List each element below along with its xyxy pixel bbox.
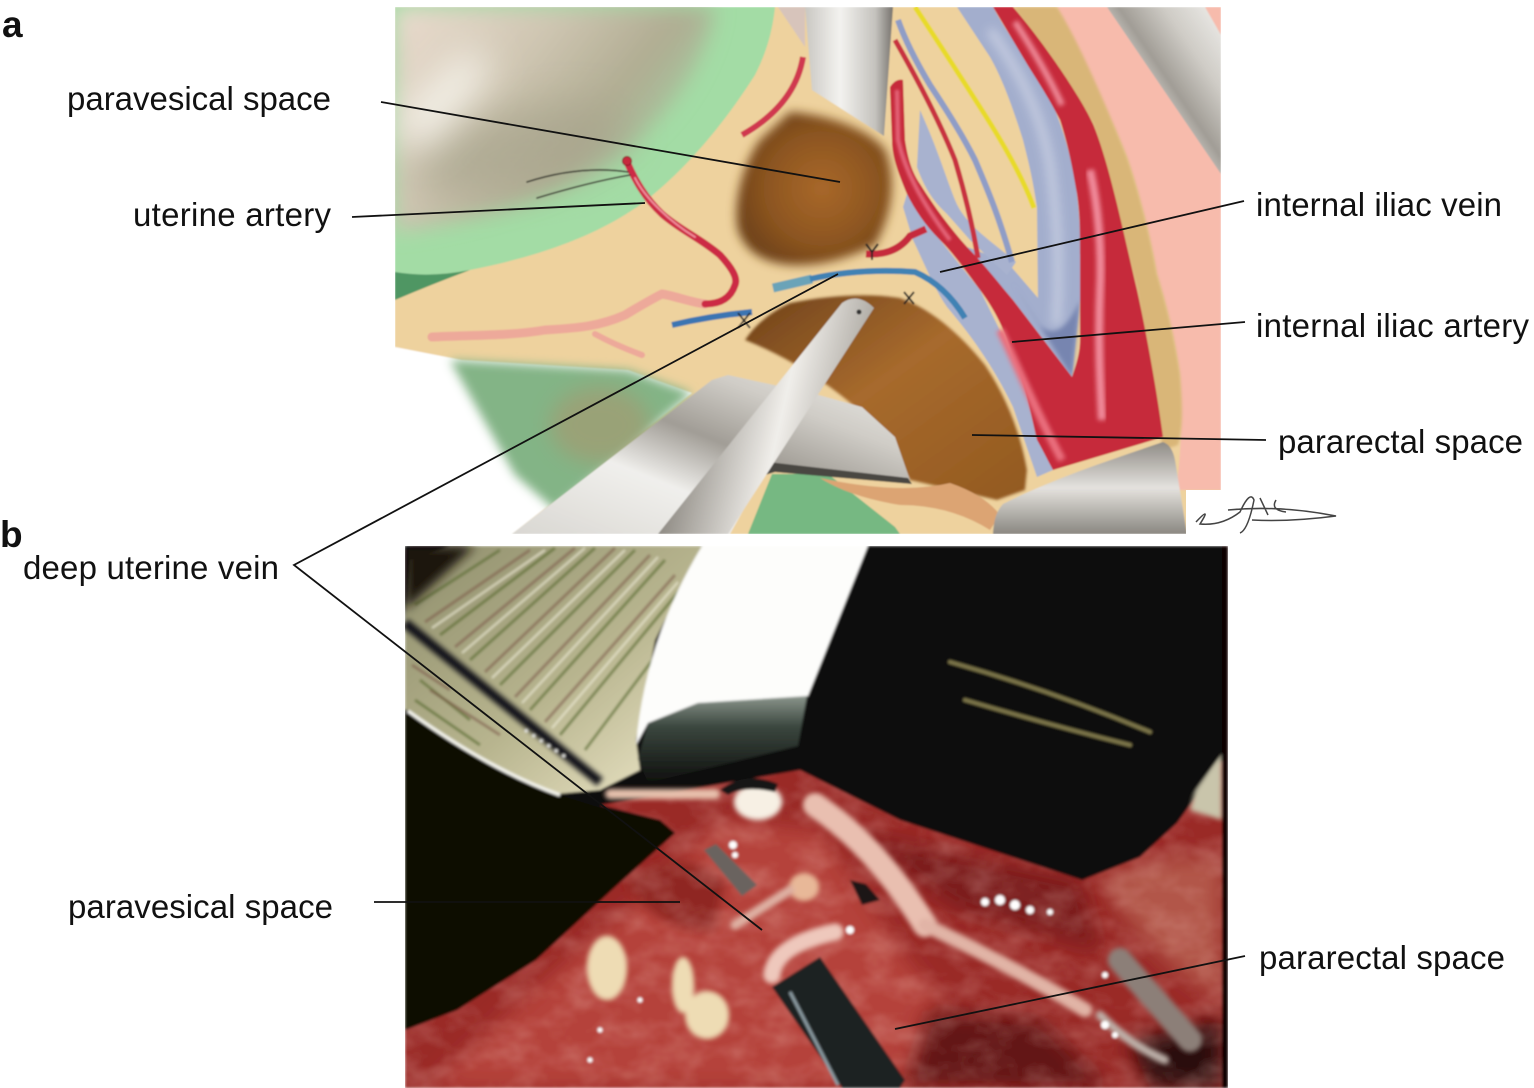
leader lines — [294, 102, 1266, 1029]
deep uterine vein — [672, 271, 965, 328]
label: paravesical space (b): paravesical space — [68, 888, 333, 925]
pale vessel structures — [610, 794, 1190, 1060]
superior vesical branch — [742, 57, 803, 135]
label: pararectal space (b): pararectal space — [1259, 939, 1505, 976]
top centre retractor — [805, 7, 893, 136]
instrument shaft — [658, 299, 874, 534]
dark side edges — [1222, 546, 1228, 1088]
left black retractor — [405, 709, 675, 1030]
pale right side tissue — [1190, 750, 1222, 820]
bottom tube — [820, 478, 1000, 530]
fatty nodules — [587, 784, 819, 1039]
dark band instrument — [405, 623, 600, 782]
striped pale tissue at upper left — [405, 546, 702, 794]
label: paravesical space (a): paravesical space — [67, 80, 331, 117]
panel b: intraoperative photograph — [405, 546, 1228, 1088]
dark clip behind ring — [720, 778, 778, 795]
surgical highlights — [588, 841, 1118, 1062]
red artery bundle — [890, 7, 1163, 470]
signature — [1186, 490, 1341, 536]
label: uterine artery: uterine artery — [133, 196, 332, 233]
label: deep uterine vein: deep uterine vein — [23, 549, 279, 586]
pararectal space — [745, 295, 1027, 500]
label: internal iliac vein: internal iliac vein — [1256, 186, 1502, 223]
tan tissue background — [395, 7, 1221, 534]
upper left bladder region — [395, 7, 775, 300]
top right retractor — [1107, 7, 1221, 174]
cut uterine artery branch — [866, 229, 926, 254]
right pink peritoneum — [1057, 7, 1221, 490]
panel a: surgical illustration — [395, 7, 1221, 534]
retractor reflections — [950, 662, 1150, 745]
tan band beside artery — [1013, 7, 1182, 450]
panel label b: b — [0, 514, 23, 555]
blue-gray vein bundle — [898, 7, 1081, 477]
ligature y — [866, 244, 878, 260]
label: internal iliac artery: internal iliac artery — [1256, 307, 1530, 344]
dark top-left corner — [405, 546, 475, 610]
ureter (yellow) — [915, 7, 1034, 208]
label: pararectal space (a): pararectal space — [1278, 423, 1523, 460]
bottom left retractor — [512, 375, 910, 534]
lower dark instrument — [772, 957, 905, 1088]
lower chrome of silver retractor — [638, 690, 808, 783]
bottom right retractor — [993, 442, 1187, 534]
panel label a: a — [2, 4, 23, 45]
pink distal uterine vessels — [432, 294, 705, 355]
white reflection arc — [408, 711, 560, 795]
white upper silver retractor — [636, 546, 868, 745]
small dark instrument tip — [704, 844, 757, 896]
red surgical field — [405, 760, 1228, 1088]
lower left green region — [395, 347, 900, 534]
uterine artery — [527, 156, 736, 304]
large black retractor — [864, 548, 1224, 878]
paravesical space — [737, 112, 892, 265]
